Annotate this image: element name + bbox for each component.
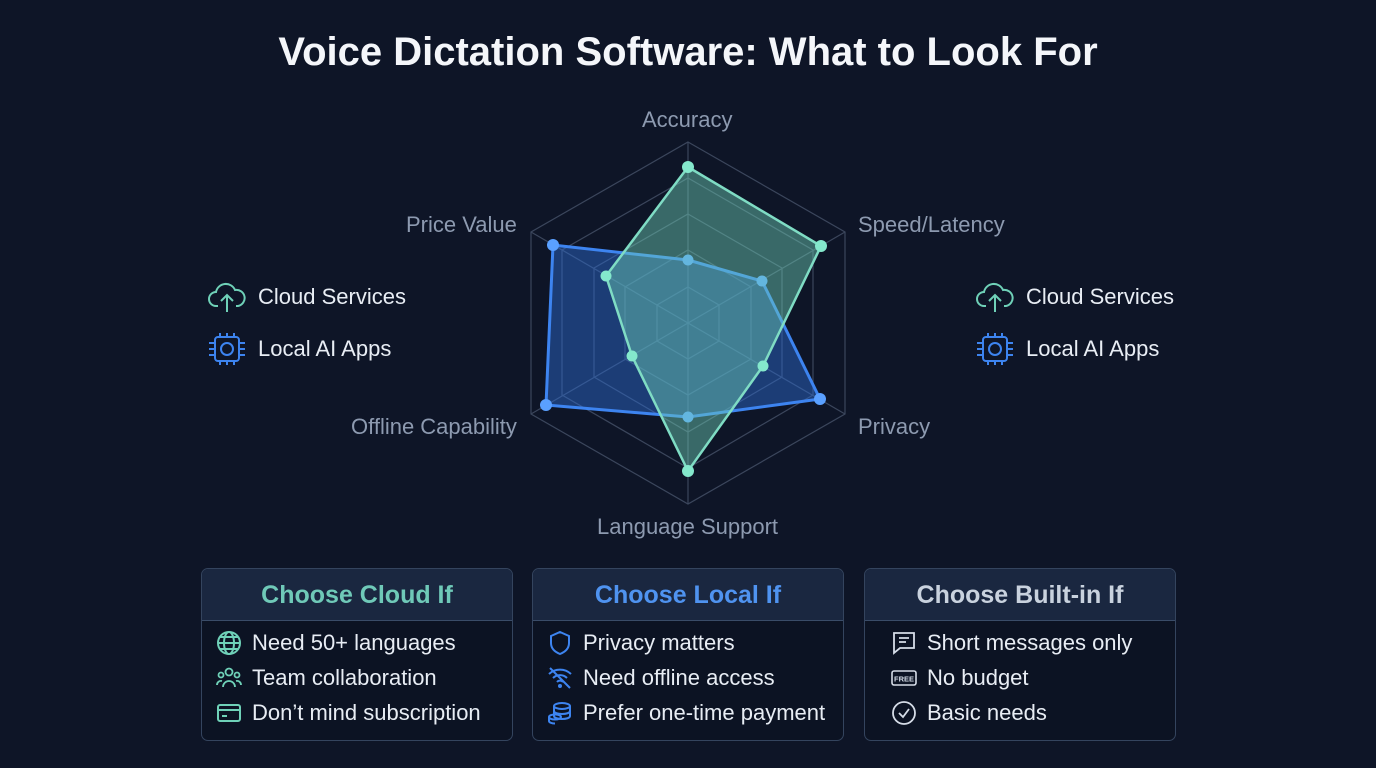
title: Voice Dictation Software: What to Look For — [278, 30, 1098, 74]
text: Speed/Latency — [858, 212, 1005, 237]
legend right: Cloud Services — [1026, 284, 1174, 309]
panel: choose cloud: Need 50+ languages — [252, 630, 456, 654]
panel: choose built-in: Choose Built-in If — [917, 581, 1123, 609]
panel: choose local: Privacy matters — [583, 630, 735, 654]
panel: choose local: Need offline access — [583, 664, 775, 690]
series: cloud services — [600, 161, 827, 477]
panel: choose local: Choose Local If — [595, 581, 781, 609]
legend right: Local AI Apps — [1026, 336, 1159, 361]
text: Language Support — [597, 514, 778, 539]
panel: choose cloud — [201, 568, 513, 741]
series: local AI apps — [540, 239, 826, 422]
panel: choose cloud: Team collaboration — [252, 664, 437, 690]
axis labels: Accuracy — [642, 107, 732, 132]
text: Privacy — [858, 414, 930, 439]
panel: choose cloud: Choose Cloud If — [261, 581, 453, 609]
panel: choose built-in: No budget — [927, 664, 1029, 690]
panel: choose built-in: Basic needs — [927, 700, 1047, 724]
panel: choose built-in: FREE — [894, 674, 914, 683]
legend left: Local AI Apps — [258, 336, 391, 361]
legend left — [208, 282, 406, 365]
panel: choose built-in — [864, 568, 1176, 741]
radar chart — [530, 141, 846, 505]
text: Offline Capability — [351, 414, 517, 439]
panel: choose built-in: Short messages only — [927, 630, 1132, 654]
panel: choose cloud: Don’t mind subscription — [252, 700, 481, 724]
text: Price Value — [406, 212, 517, 237]
legend left: Cloud Services — [258, 284, 406, 309]
panel: choose local — [532, 568, 844, 741]
legend right — [976, 282, 1174, 365]
panel: choose local: Prefer one-time payment — [583, 700, 825, 724]
